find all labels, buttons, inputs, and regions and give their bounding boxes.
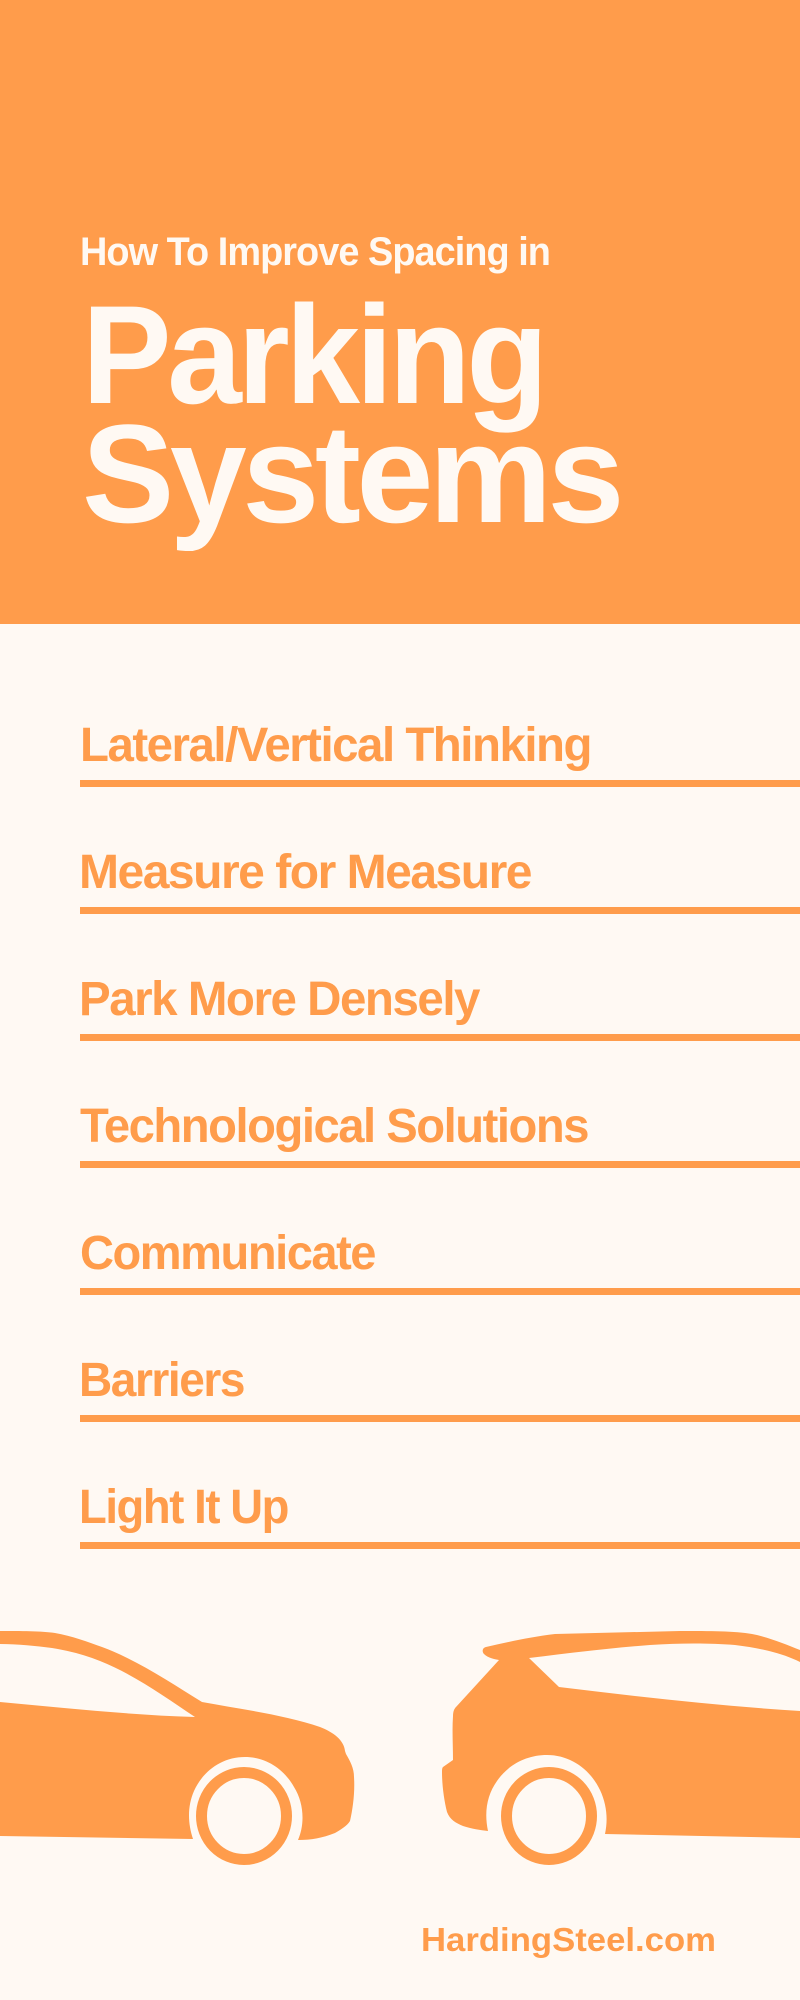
tip: Light It Up: Light It Up <box>79 1481 288 1534</box>
tip: Communicate <box>80 1227 800 1295</box>
car window <box>0 1644 195 1717</box>
tip: Measure for Measure: Measure for Measure <box>79 846 532 899</box>
tip: Lateral/Vertical Thinking <box>80 719 800 787</box>
title line: Systems: Systems <box>82 395 620 552</box>
tip: Park More Densely: Park More Densely <box>79 973 481 1026</box>
car window <box>529 1644 800 1711</box>
car wheel <box>202 1772 286 1860</box>
list of tips <box>79 719 800 1549</box>
subtitle: How To Improve Spacing in <box>80 230 550 274</box>
title line: Parking: Parking <box>82 276 544 433</box>
tip: Light It Up <box>79 1481 800 1549</box>
car wheel <box>506 1772 592 1860</box>
tip: Measure for Measure <box>79 846 800 914</box>
icon: right car rear <box>442 1631 800 1860</box>
icon: left car front <box>0 1631 354 1860</box>
tip: Lateral/Vertical Thinking: Lateral/Vertical Thinking <box>80 719 591 772</box>
tip: Technological Solutions <box>80 1100 800 1168</box>
tip: Barriers: Barriers <box>79 1354 244 1407</box>
header panel <box>0 0 800 624</box>
tip: Technological Solutions: Technological Solutions <box>80 1100 588 1153</box>
tip: Park More Densely <box>79 973 800 1041</box>
website footer: HardingSteel.com <box>421 1921 716 1958</box>
tip: Barriers <box>79 1354 800 1422</box>
tip: Communicate: Communicate <box>80 1227 376 1280</box>
